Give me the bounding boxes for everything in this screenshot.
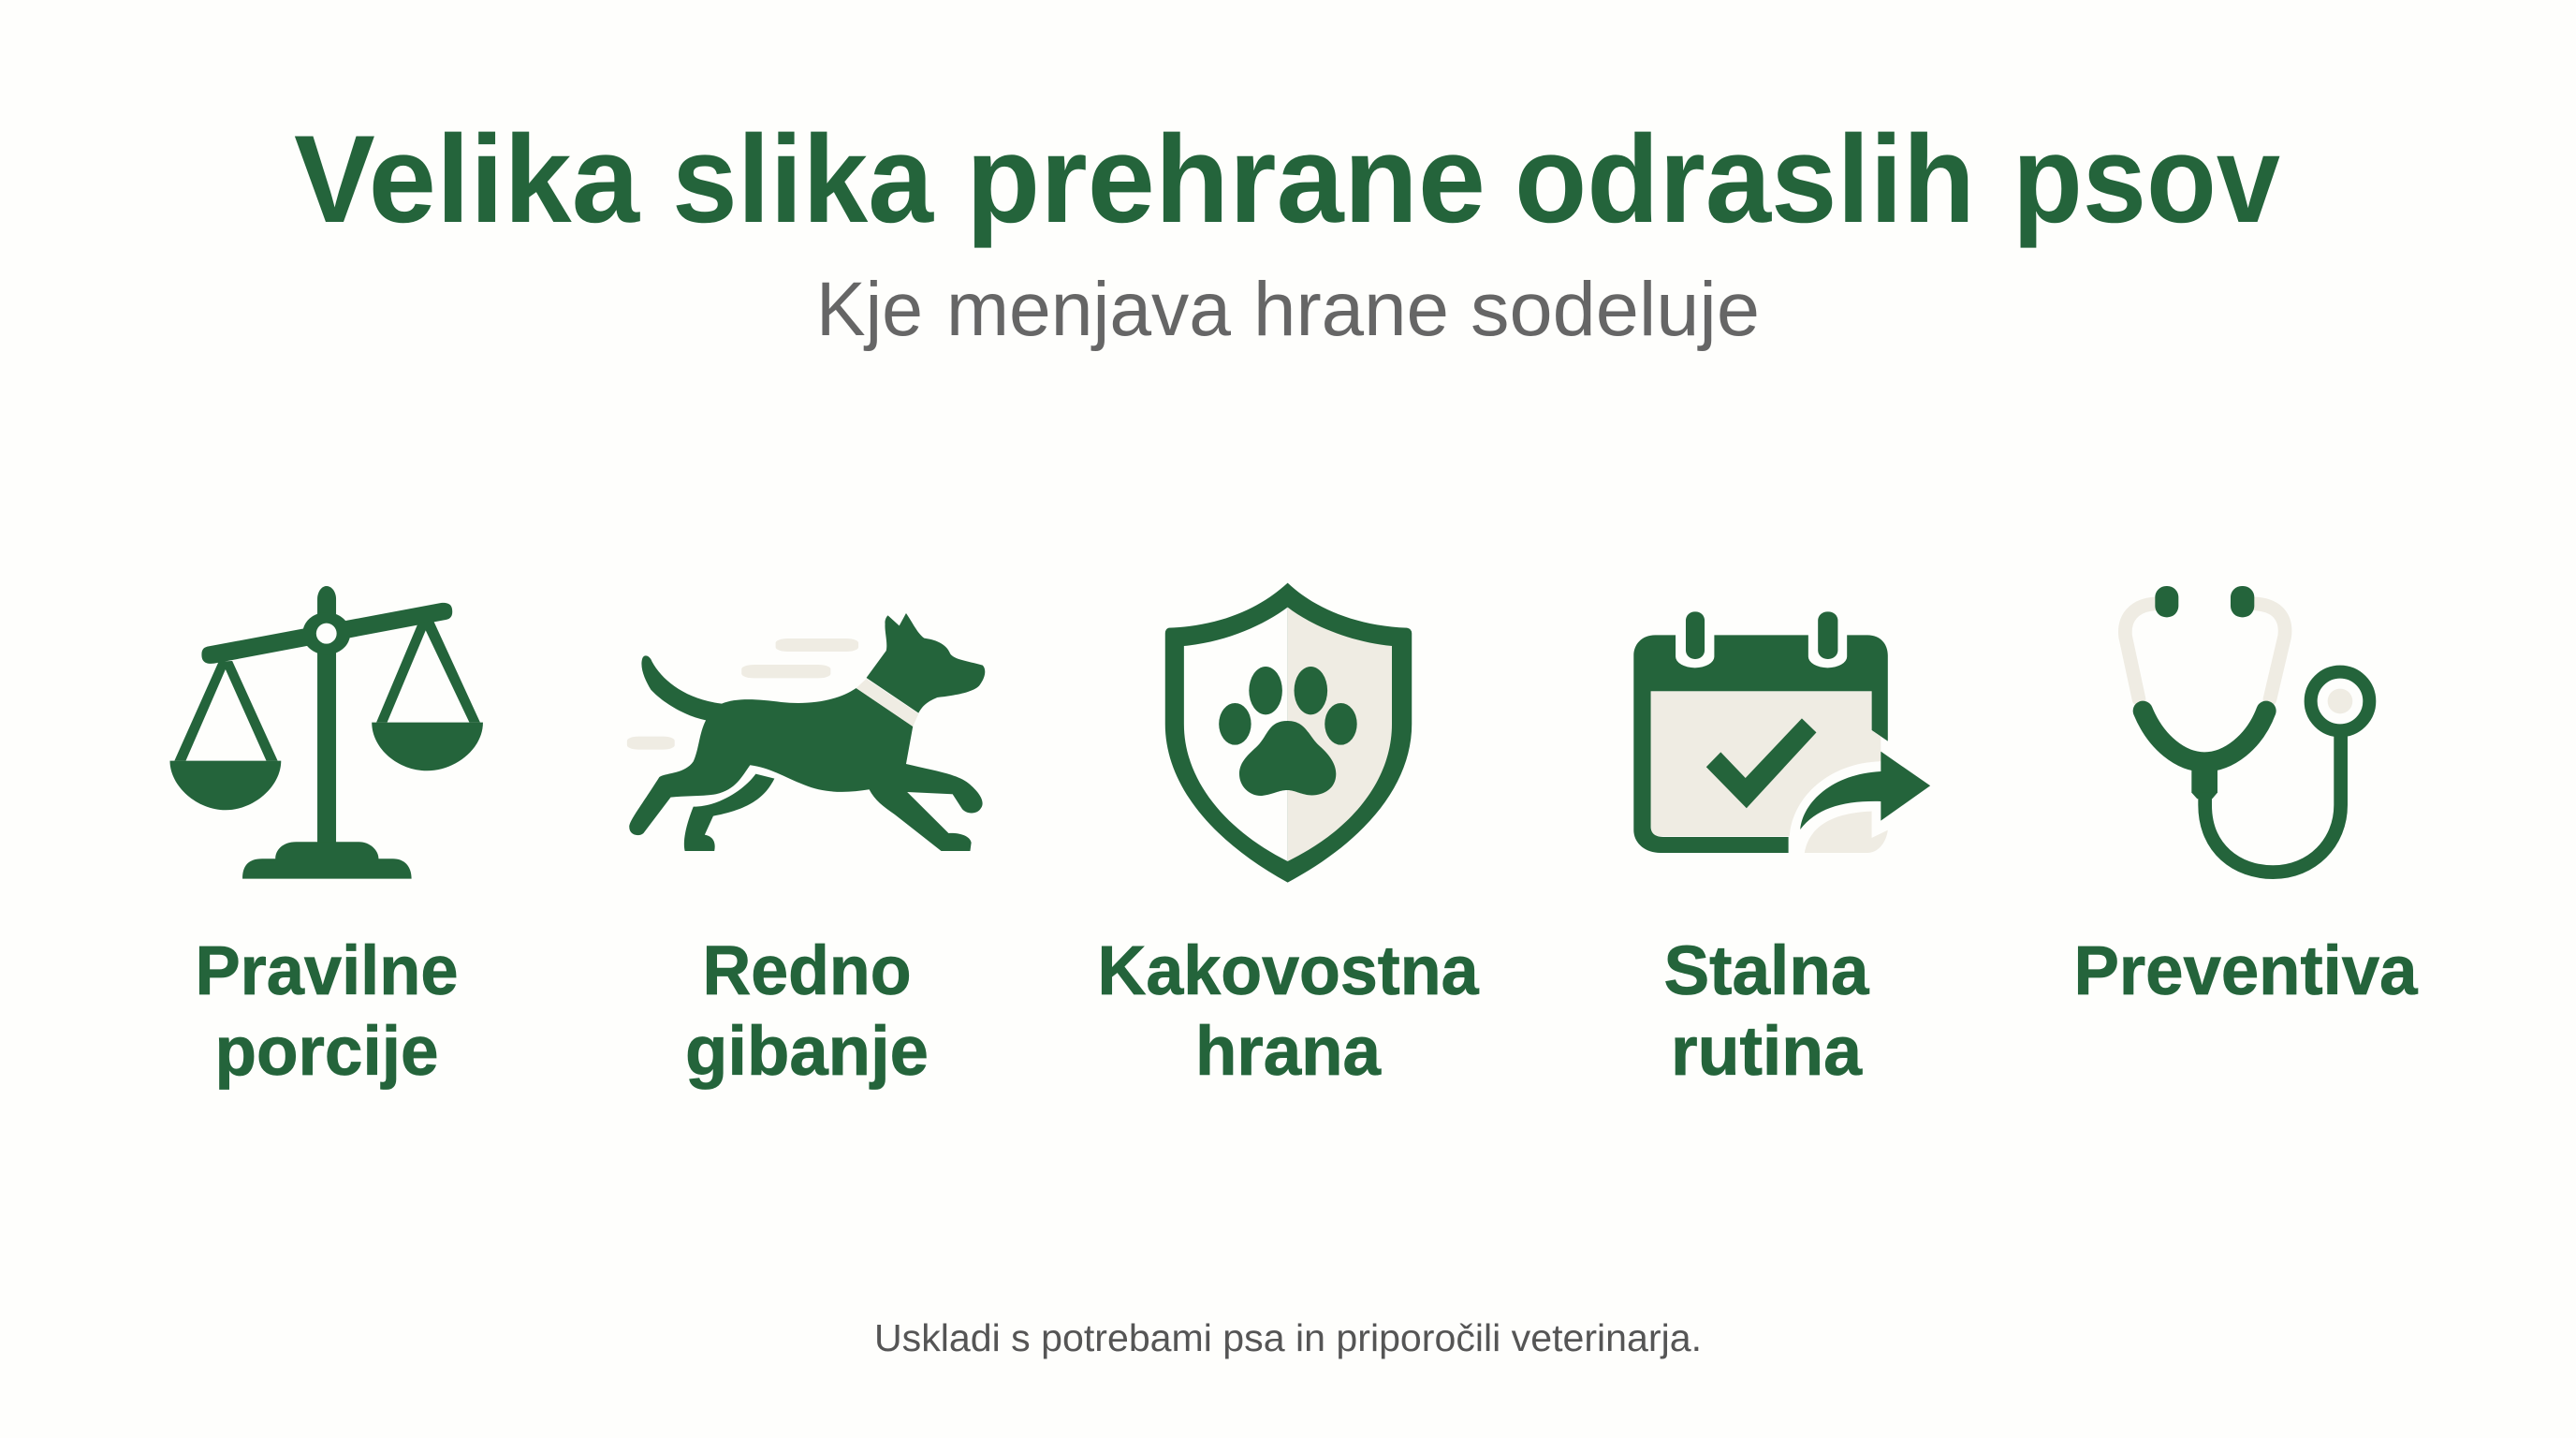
icon: balance scale [170,586,483,879]
subtitle: menjava [946,267,1231,352]
label: Preventiva: Preventiva [2074,932,2418,1009]
icon: calendar with check and arrow [1633,609,1930,853]
title: odraslih [1515,110,1975,249]
label: Redno gibanje: Redno [702,932,912,1009]
title [294,110,2280,249]
title: slika [672,110,934,249]
label: Stalna rutina: rutina [1671,1012,1863,1090]
label: Pravilne porcije: porcije [215,1012,438,1090]
icon: stethoscope [2125,586,2369,873]
label: Stalna rutina [1664,932,1869,1090]
label: Kakovostna hrana: Kakovostna [1097,932,1479,1009]
subtitle: hrane [1253,267,1449,352]
title: Velika [294,110,640,249]
label: Stalna rutina: Stalna [1664,932,1869,1009]
icon: running dog [627,613,985,851]
footer note: Uskladi s potrebami psa in priporočili veterinarja. [874,1316,1702,1359]
subtitle [816,267,1760,352]
label: Pravilne porcije: Pravilne [195,932,459,1009]
label: Redno gibanje [685,932,929,1090]
subtitle: sodeluje [1471,267,1760,352]
title: psov [2012,110,2280,249]
title: prehrane [966,110,1486,249]
label: Kakovostna hrana [1097,932,1479,1090]
label: Kakovostna hrana: hrana [1195,1012,1382,1090]
label: Redno gibanje: gibanje [685,1012,929,1090]
icon: shield with paw [1165,583,1412,883]
label: Pravilne porcije [195,932,459,1090]
subtitle: Kje [816,267,923,352]
